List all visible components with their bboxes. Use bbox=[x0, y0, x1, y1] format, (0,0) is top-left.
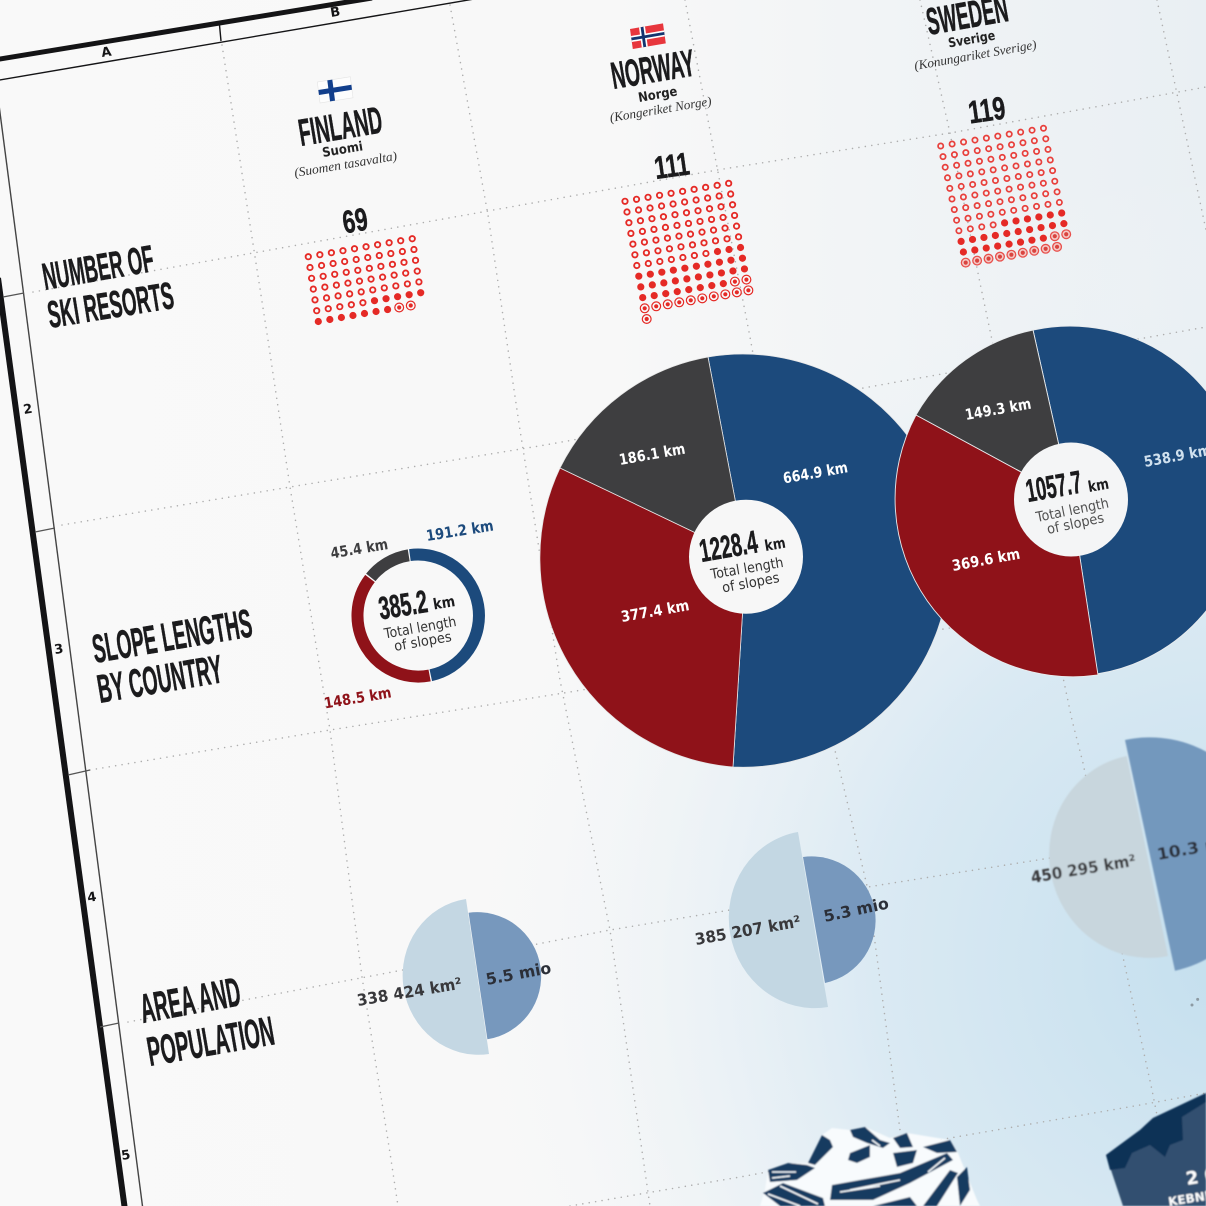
axis labels: 5 bbox=[120, 1148, 132, 1164]
text: SLOPE LENGTHS bbox=[89, 602, 255, 672]
axis labels: 2 bbox=[22, 402, 34, 418]
row heading: slope lengths by country: BY COUNTRY bbox=[94, 647, 226, 712]
dot matrix: 69 resorts bbox=[308, 239, 421, 322]
panel: Finland resort count bbox=[308, 201, 421, 322]
centre total: 385.2 bbox=[376, 583, 430, 626]
panel: Finland slope chart bbox=[323, 517, 495, 712]
half circle: population bbox=[1125, 737, 1206, 971]
centre total: km bbox=[1087, 475, 1110, 496]
centre total bbox=[697, 523, 787, 596]
centre total: of slopes bbox=[721, 570, 781, 596]
pie chart bbox=[895, 326, 1206, 677]
label: population: 5.3 mio bbox=[822, 894, 890, 926]
row heading: slope lengths by country bbox=[89, 602, 255, 712]
count number: 119 bbox=[966, 90, 1008, 130]
label: blue slopes: 664.9 km bbox=[782, 458, 849, 487]
row heading: number of ski resorts: SKI RESORTS bbox=[45, 275, 177, 337]
official name: (Konungariket Sverige) bbox=[913, 37, 1038, 73]
country name: NORWAY bbox=[608, 43, 698, 98]
label: red slopes: 377.4 km bbox=[620, 596, 691, 626]
half circle: population bbox=[469, 912, 541, 1039]
axis labels bbox=[22, 5, 341, 1164]
centre total bbox=[376, 583, 458, 655]
row heading: area and population bbox=[136, 969, 278, 1075]
centre total: of slopes bbox=[1046, 510, 1106, 538]
axis labels: 4 bbox=[86, 890, 98, 906]
axis labels: B bbox=[329, 5, 341, 21]
centre total: km bbox=[432, 592, 456, 613]
count number: 69 bbox=[340, 201, 370, 240]
centre total bbox=[1023, 464, 1110, 538]
donut chart bbox=[357, 555, 479, 677]
country name: FINLAND bbox=[296, 100, 385, 155]
icon: Finnish flag bbox=[317, 77, 353, 103]
label: area: 385 207 km² bbox=[693, 912, 802, 949]
panel: Sweden slope chart bbox=[895, 326, 1206, 677]
local name: Suomi bbox=[321, 139, 364, 161]
panel: Norway area and population bbox=[693, 832, 890, 1008]
label: area: 450 295 km² bbox=[1030, 851, 1137, 887]
centre total: Total length bbox=[1034, 495, 1110, 526]
centre total: 1057.7 bbox=[1023, 464, 1084, 509]
official name: (Suomen tasavalta) bbox=[293, 148, 398, 180]
label: black slopes: 149.3 km bbox=[964, 395, 1033, 424]
text: POPULATION bbox=[144, 1008, 278, 1075]
label: red slopes: 369.6 km bbox=[950, 545, 1022, 575]
local name: Sverige bbox=[947, 29, 997, 51]
row heading: area and population: AREA AND bbox=[136, 969, 244, 1032]
pie chart bbox=[540, 354, 949, 767]
icon: Norwegian flag bbox=[630, 23, 666, 49]
illustration: snowy mountain bbox=[760, 1127, 980, 1206]
half circle: population bbox=[803, 856, 876, 983]
label: red slopes: 148.5 km bbox=[323, 683, 393, 712]
half circle: area bbox=[1049, 756, 1168, 958]
row heading: number of ski resorts bbox=[39, 238, 177, 337]
panel: Finland header bbox=[293, 77, 398, 180]
row heading: number of ski resorts: NUMBER OF bbox=[39, 238, 157, 299]
panel: Norway header bbox=[608, 23, 713, 125]
dot matrix: 119 resorts bbox=[941, 128, 1066, 263]
panel: Sweden header bbox=[913, 0, 1038, 73]
centre total: of slopes bbox=[393, 629, 453, 655]
half circle: area bbox=[729, 832, 828, 1008]
panel: Sweden area and population bbox=[1030, 737, 1206, 971]
local name: Norge bbox=[637, 84, 679, 106]
centre total: Total length bbox=[709, 555, 785, 583]
official name: (Kongeriket Norge) bbox=[609, 93, 713, 125]
count number: 111 bbox=[652, 145, 692, 186]
panel: Norway resort count bbox=[625, 145, 748, 319]
table frame and axis rulers bbox=[0, 0, 480, 1206]
label: population: 5.5 mio bbox=[484, 958, 553, 989]
label: black slopes: 45.4 km bbox=[329, 535, 389, 562]
illustration: dark mountain badge bbox=[1106, 1093, 1206, 1206]
axis labels: 3 bbox=[53, 642, 65, 658]
centre total: 1228.4 bbox=[697, 523, 760, 569]
label: area: 338 424 km² bbox=[356, 974, 463, 1010]
label: black slopes: 186.1 km bbox=[618, 440, 687, 469]
panel: Norway slope chart bbox=[540, 354, 949, 767]
dot matrix: 111 resorts bbox=[625, 183, 748, 319]
panel: Sweden resort count bbox=[941, 90, 1066, 263]
centre total: km bbox=[763, 534, 787, 555]
axis labels: A bbox=[100, 45, 113, 61]
panel: Finland area and population bbox=[356, 899, 553, 1055]
half circle: area bbox=[403, 899, 489, 1055]
centre total: Total length bbox=[382, 614, 458, 643]
label: blue slopes: 191.2 km bbox=[425, 517, 495, 545]
